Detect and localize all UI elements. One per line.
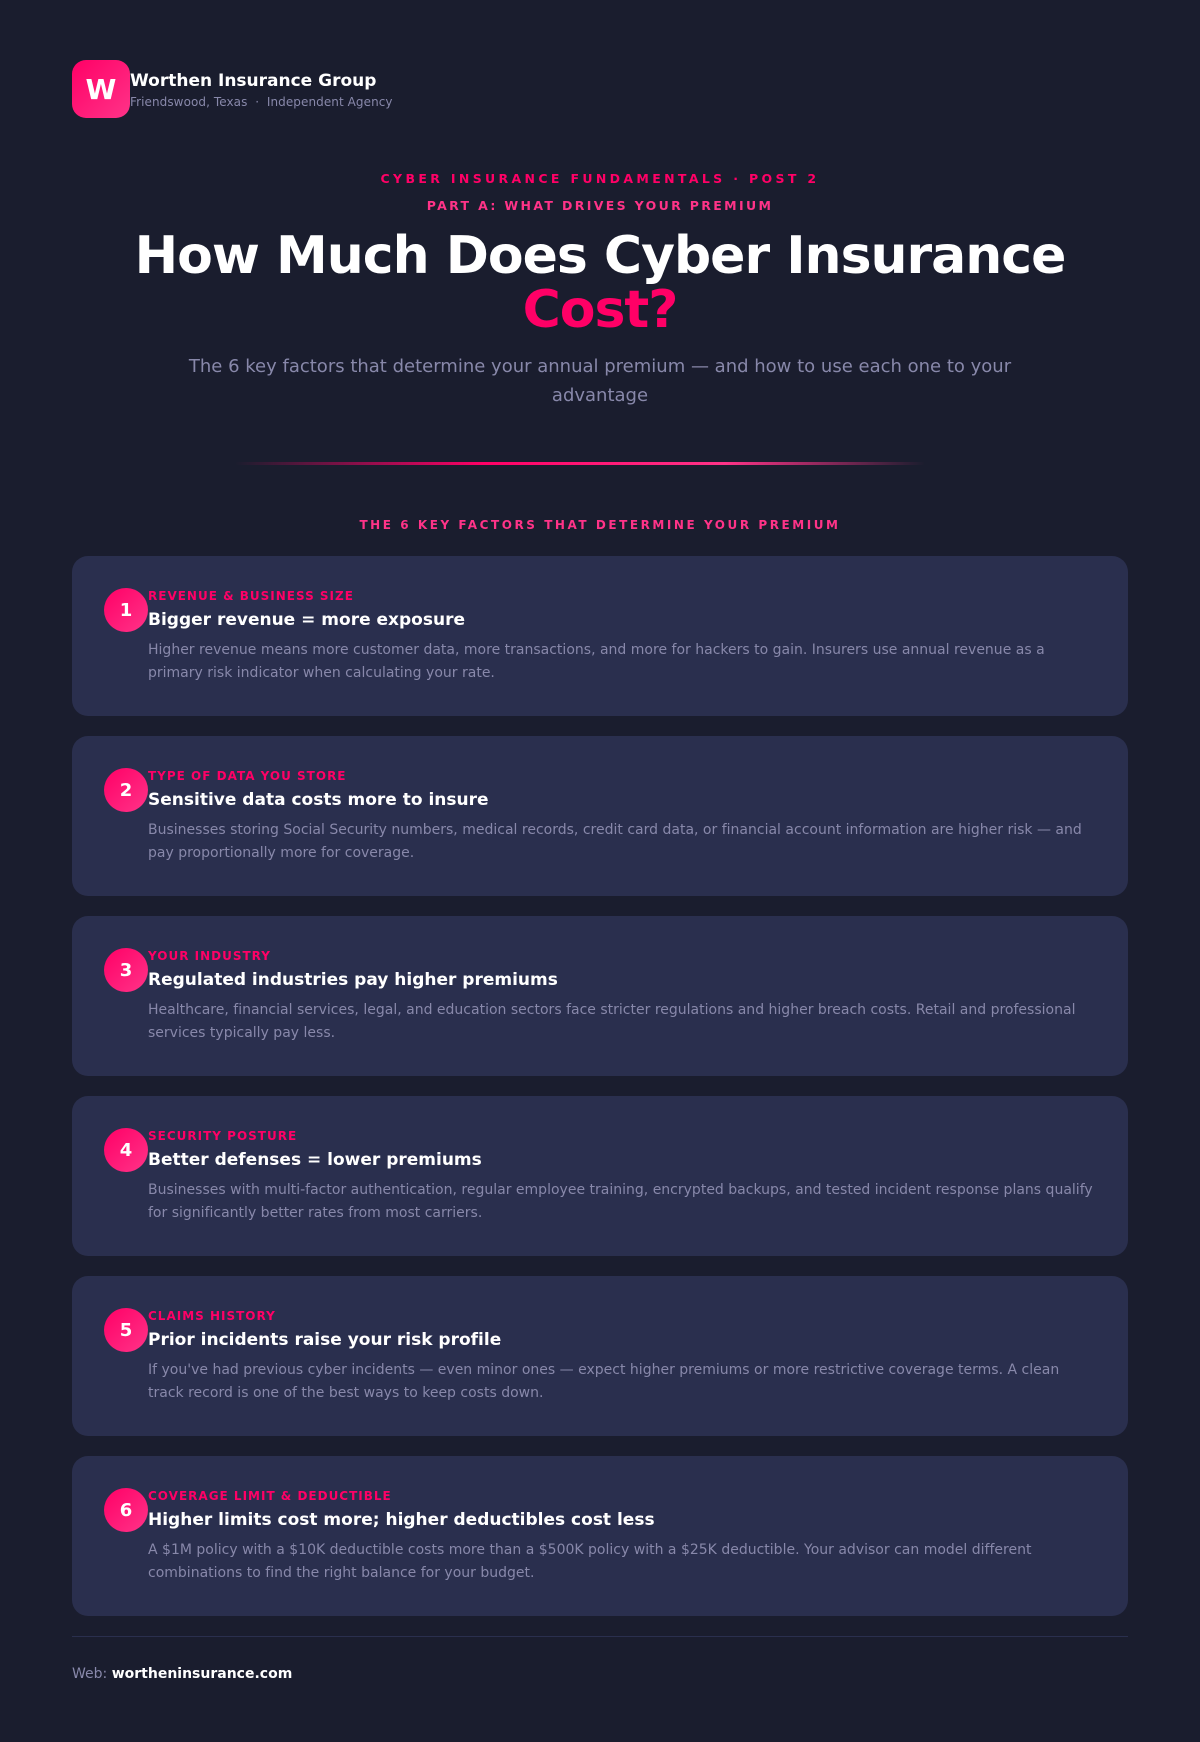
panel: factor 1 — [72, 556, 1128, 716]
panel: factor 5 — [72, 1276, 1128, 1436]
title — [135, 226, 1065, 340]
subtitle: advantage — [552, 385, 648, 406]
factor 6 heading: Higher limits cost more; higher deductibles cost less — [148, 1510, 655, 1530]
brand name: Worthen Insurance Group — [130, 71, 376, 91]
logo badge: W — [86, 73, 116, 106]
factor 3 description: Healthcare, financial services, legal, and education sectors face stricter regulations and higher breach costs. Retail and professional services typically pay less. — [148, 1002, 1075, 1041]
divider — [235, 462, 925, 465]
number badge 6: 6 — [120, 1500, 132, 1521]
factor 6 label: COVERAGE LIMIT & DEDUCTIBLE — [148, 1489, 392, 1503]
factor 2 description: Businesses storing Social Security numbers, medical records, credit card data, or financial account information are higher risk — and pay proportionally more for coverage. — [148, 822, 1082, 861]
factor 5 heading: Prior incidents raise your risk profile — [148, 1330, 501, 1350]
title: Cost? — [523, 280, 677, 340]
footer web address: Web: wortheninsurance.com — [72, 1666, 292, 1682]
factor 4 label: SECURITY POSTURE — [148, 1129, 297, 1143]
number badge 1: 1 — [120, 600, 132, 621]
factor 2 label: TYPE OF DATA YOU STORE — [148, 769, 347, 783]
number badge 3 — [104, 948, 148, 992]
brand tagline: Friendswood, Texas · Independent Agency — [130, 95, 393, 109]
panel: factor 2 — [72, 736, 1128, 896]
number badge 4 — [104, 1128, 148, 1172]
panel: factor 6 — [72, 1456, 1128, 1616]
number badge 1 — [104, 588, 148, 632]
logo badge — [72, 60, 130, 118]
factor 5 description: If you've had previous cyber incidents — even minor ones — expect higher premiums or more restrictive coverage terms. A clean track record is one of the best ways to keep costs down. — [148, 1362, 1059, 1401]
panel: factor 4 — [72, 1096, 1128, 1256]
subtitle: The 6 key factors that determine your annual premium — and how to use each one to your — [189, 356, 1011, 377]
number badge 3: 3 — [120, 960, 132, 981]
factor 2 heading: Sensitive data costs more to insure — [148, 790, 489, 810]
number badge 5: 5 — [120, 1320, 132, 1341]
eyebrow: part: PART A: WHAT DRIVES YOUR PREMIUM — [427, 198, 773, 213]
factor 4 description: Businesses with multi-factor authentication, regular employee training, encrypted backups, and tested incident response plans qualify for significantly better rates from most carriers. — [148, 1182, 1093, 1221]
factor 1 description: Higher revenue means more customer data, more transactions, and more for hackers to gain. Insurers use annual revenue as a primary risk indicator when calculating your rate. — [148, 642, 1045, 681]
eyebrow: series: CYBER INSURANCE FUNDAMENTALS · POST 2 — [381, 171, 819, 186]
title: How Much Does Cyber Insurance — [135, 226, 1065, 286]
factor 1 label: REVENUE & BUSINESS SIZE — [148, 589, 354, 603]
factor 4 heading: Better defenses = lower premiums — [148, 1150, 482, 1170]
number badge 6 — [104, 1488, 148, 1532]
number badge 5 — [104, 1308, 148, 1352]
factor 3 heading: Regulated industries pay higher premiums — [148, 970, 558, 990]
number badge 2: 2 — [120, 780, 132, 801]
number badge 4: 4 — [120, 1140, 132, 1161]
factor 6 description: A $1M policy with a $10K deductible costs more than a $500K policy with a $25K deductible. Your advisor can model different combinations to find the right balance for your budget. — [148, 1542, 1031, 1581]
factor 1 heading: Bigger revenue = more exposure — [148, 610, 465, 630]
factor 5 label: CLAIMS HISTORY — [148, 1309, 276, 1323]
panel: factor 3 — [72, 916, 1128, 1076]
subtitle — [188, 356, 1012, 406]
section heading: THE 6 KEY FACTORS THAT DETERMINE YOUR PREMIUM — [359, 518, 841, 532]
factor 3 label: YOUR INDUSTRY — [148, 949, 271, 963]
number badge 2 — [104, 768, 148, 812]
